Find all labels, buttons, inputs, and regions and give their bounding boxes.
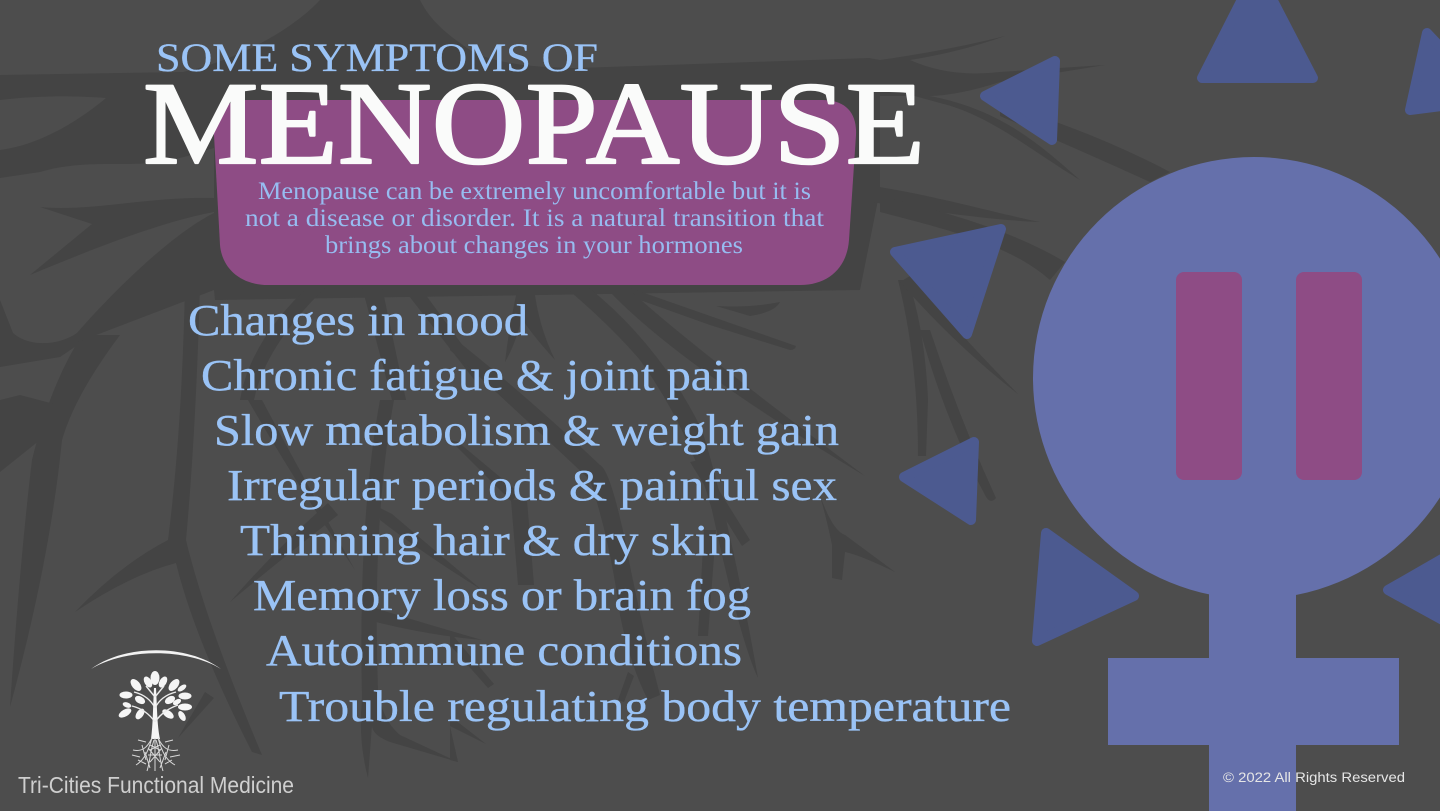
triangle large left: [895, 229, 1001, 334]
intro paragraph: brings about changes in your hormones: [325, 232, 743, 259]
right bar: [1296, 272, 1362, 480]
symbol crossbar: [1108, 658, 1399, 745]
triangle upper middle: [985, 61, 1055, 140]
logo arc: [91, 650, 221, 669]
decorative triangles: [895, 0, 1440, 641]
logo trunk and branches: [151, 688, 160, 739]
logo roots: [132, 738, 180, 771]
symptoms list: Changes in mood: [188, 296, 528, 345]
triangle bottom: [1037, 533, 1134, 641]
logo tree crown: [117, 671, 192, 722]
heading: some symptoms of: SOME SYMPTOMS OF: [156, 35, 598, 80]
copyright notice: © 2022 All Rights Reserved: [1223, 770, 1405, 785]
background tree silhouette: [0, 0, 1170, 778]
symptoms list: Memory loss or brain fog: [253, 571, 751, 620]
symptoms list: [188, 296, 1011, 731]
symptoms list: Slow metabolism & weight gain: [214, 406, 839, 455]
purple intro panel: [214, 100, 856, 285]
intro paragraph: Menopause can be extremely uncomfortable but it is: [258, 178, 811, 205]
pause bars: [1176, 272, 1362, 480]
female symbol: [1033, 157, 1440, 811]
symptoms list: Thinning hair & dry skin: [240, 516, 733, 565]
symptoms list: Chronic fatigue & joint pain: [201, 351, 750, 400]
symptoms list: Irregular periods & painful sex: [227, 461, 837, 510]
logo: tri-cities functional medicine: [18, 650, 294, 798]
triangle top right edge: [1410, 33, 1440, 110]
triangle lower left: [904, 442, 974, 520]
intro paragraph: not a disease or disorder. It is a natural transition that: [245, 205, 824, 232]
symbol circle: [1033, 157, 1440, 599]
triangle top: [1202, 0, 1313, 78]
symbol stem: [1209, 590, 1296, 811]
logo wordmark: Tri-Cities Functional Medicine: [18, 772, 294, 798]
title: menopause: MENOPAUSE: [143, 58, 925, 189]
intro paragraph: [245, 178, 824, 259]
symptoms list: Autoimmune conditions: [266, 626, 742, 675]
left bar: [1176, 272, 1242, 480]
symptoms list: Trouble regulating body temperature: [279, 682, 1011, 731]
triangle right edge: [1388, 543, 1440, 635]
